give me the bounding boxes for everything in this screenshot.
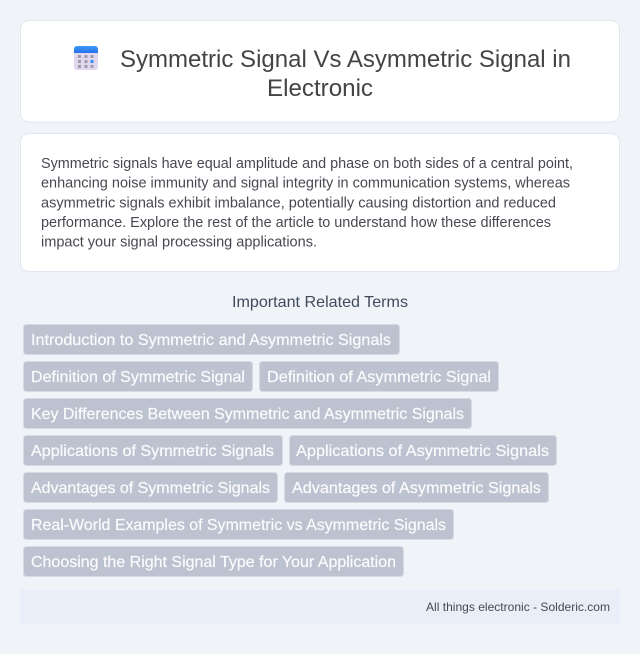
text block: intro: enhancing noise immunity and signal integrity in communication systems, whereas — [41, 176, 570, 192]
chip: real-world examples: Real-World Examples of Symmetric vs Asymmetric Signals — [31, 517, 446, 534]
panel: intro paragraph — [20, 134, 620, 272]
footer: All things electronic - Solderic.com — [426, 600, 610, 614]
chip: advantages symmetric — [24, 472, 278, 502]
footer — [20, 590, 620, 624]
text block: intro: Symmetric signals have equal amplitude and phase on both sides of a central point, — [41, 156, 573, 172]
chip: definition asymmetric — [260, 362, 498, 392]
list: related term chips — [24, 324, 556, 576]
text block: intro: asymmetric signals exhibit imbalance, potentially causing distortion and reduced — [41, 196, 556, 212]
chip: advantages asymmetric — [284, 472, 548, 502]
chip: applications asymmetric — [290, 436, 556, 466]
text block: intro — [41, 156, 573, 250]
chip: key differences: Key Differences Between Symmetric and Asymmetric Signals — [31, 406, 464, 423]
chip: applications symmetric — [24, 436, 282, 466]
icon: calendar grid — [74, 46, 98, 70]
chip: choosing signal type: Choosing the Right Signal Type for Your Application — [31, 554, 396, 571]
text block: intro: impact your signal processing applications. — [41, 234, 317, 250]
chip: introduction: Introduction to Symmetric and Asymmetric Signals — [31, 332, 391, 349]
chip: introduction — [24, 324, 400, 354]
chip: definition asymmetric: Definition of Asymmetric Signal — [267, 369, 491, 386]
chip: real-world examples — [24, 510, 454, 540]
title: Electronic — [267, 75, 373, 102]
chip: advantages symmetric: Advantages of Symmetric Signals — [31, 480, 270, 497]
chip: advantages asymmetric: Advantages of Asymmetric Signals — [292, 480, 541, 497]
chip: applications symmetric: Applications of Symmetric Signals — [31, 443, 274, 460]
title: Symmetric Signal Vs Asymmetric Signal in — [120, 46, 571, 73]
title — [120, 46, 571, 102]
chip: key differences — [24, 398, 472, 428]
chip: definition symmetric: Definition of Symmetric Signal — [31, 369, 245, 386]
chip: choosing signal type — [24, 546, 404, 576]
chip: definition symmetric — [24, 362, 252, 392]
chip: applications asymmetric: Applications of Asymmetric Signals — [296, 443, 549, 460]
text block: intro: performance. Explore the rest of the article to understand how these differences — [41, 215, 551, 231]
panel: title card — [20, 20, 620, 122]
heading: related terms: Important Related Terms — [232, 294, 408, 311]
